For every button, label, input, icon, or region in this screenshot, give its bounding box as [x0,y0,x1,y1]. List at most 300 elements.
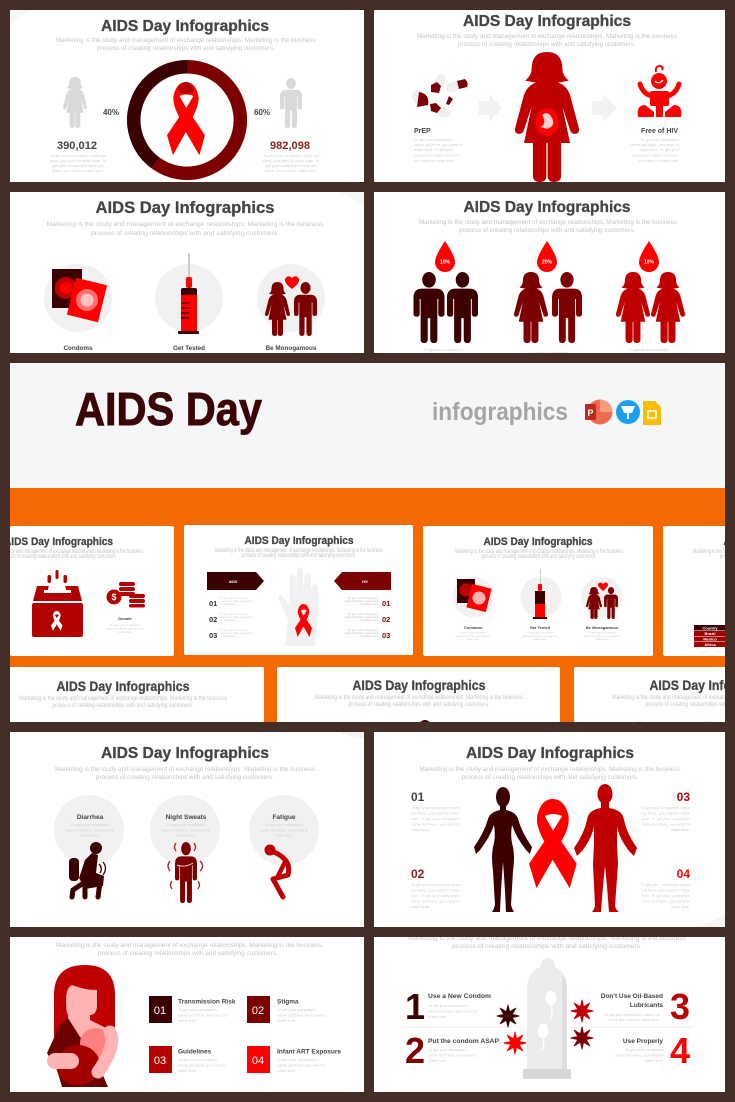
card subtitle [315,695,523,708]
step 1 [405,986,491,1027]
card background [423,526,653,656]
item 04: Infant ART Exposure [277,1048,341,1056]
text Night Sweats: name out there, you need to [162,828,210,832]
list left: To get your company's [220,628,248,632]
illustration: mother with baby [47,965,118,1087]
block 02: To get your company's name [411,882,461,887]
corner swoosh [338,192,364,208]
card heading: AIDS Day Infographics [352,677,486,693]
card background [10,667,264,727]
item 01: name out there, you need to [178,1012,227,1018]
block 01: name out there, you need to [411,822,460,826]
text Diarrhea: To get your company's [71,822,109,827]
icon: baby [638,66,681,117]
block 03 [640,790,690,832]
table: Brazil [705,631,715,636]
card: donate [0,526,174,656]
card subtitle [455,549,623,560]
subtitle: Marketing is the study and management of exchange relationships. Marketing is the business [46,222,324,228]
star dark [497,1005,519,1027]
item 02: Stigma [277,998,299,1006]
panel: couples statistics slide [374,192,725,355]
item 01: Transmission Risk [178,998,236,1006]
item 02 [247,996,326,1023]
subtitle: Marketing is the study and management of exchange relationships. Marketing is the business [56,943,322,949]
small captions: To get your company's [630,347,668,352]
small captions: To get your company's [530,350,568,355]
block 04: sure. To get your company's [642,893,690,898]
text Night Sweats: To get your company's [167,822,205,827]
heading: AIDS Day Infographics [101,745,269,762]
text block PrEP: make sure. To get your [414,147,454,152]
subtitle: process of creating relationships with and satisfying customers. [458,42,636,48]
small text: To get your company's [526,630,555,634]
text block right [263,153,320,173]
panel background [374,732,725,927]
text block PrEP: you need to make sure. [414,158,455,163]
panel background [374,937,725,1092]
card: bottom middle [277,667,560,732]
step 4: name out there, you need to [615,1052,664,1058]
label Condoms: Condoms [63,345,93,352]
icon: syringe [533,569,547,619]
block 04 [640,867,690,909]
block 03: sure. To get your company's [642,816,690,821]
drop 20%: 20% [542,260,553,266]
card: bottom right [574,667,735,749]
card background [574,667,734,727]
panel: body silhouettes slide [374,732,725,927]
table [694,625,729,647]
step 4 [615,1030,690,1071]
block 01 [411,790,461,832]
block 02: 02 [411,867,425,881]
card subtitle: Marketing is the study and management of exchange relationships. Marketing is the business [215,548,383,554]
labels: Condoms [464,625,483,630]
male silhouette [574,784,637,912]
list left: name out there, you need [220,615,252,619]
female silhouette [474,787,532,912]
drop 10%: 10% [440,260,451,266]
step 4: make sure. [645,1058,664,1063]
step 1: Use a New Condom [428,993,491,1000]
item 04: 04 [252,1055,264,1067]
circles [452,576,622,618]
star bright [504,1032,526,1054]
text Fatigue: make sure. [274,832,294,838]
label Night Sweats: Night Sweats [166,814,207,821]
step 1: name out there, you need to [428,1008,477,1014]
subtitle: process of creating relationships with and satisfying customers. [459,228,635,234]
panel: prevention methods slide [10,192,364,353]
head peek [419,720,431,732]
list left: name out there, you need [220,599,252,603]
pair: woman and man [514,272,582,343]
text block right: get your company's name out [266,163,317,168]
block 04: 04 [677,867,690,881]
list right [344,596,390,640]
icon: ribbon [529,799,577,888]
text Fatigue: To get your company's [265,822,303,827]
list left: 03 [209,631,217,640]
icon: Google Slides [643,401,661,425]
block 02: out there, you need to make [411,888,459,892]
list right: to make sure. [360,618,378,622]
icon: woman grey [63,77,87,128]
card: bottom left [10,667,264,727]
label Donate: Donate [118,616,133,621]
block 02: name out there, you need to [411,898,460,904]
subtitle: process of creating relationships with and satisfying customers. [96,775,274,781]
list left: To get your company's [220,596,248,600]
text block PrEP: name out there, you need to [414,142,463,147]
arrow left [479,94,502,122]
list left: To get your company's [220,612,248,616]
text Night Sweats [162,822,210,838]
panel: breastfeeding slide [10,920,364,1092]
small captions [424,347,668,355]
item 01: 01 [154,1005,166,1017]
item 03: 03 [154,1055,166,1067]
step 2: 2 [405,1030,425,1071]
card subtitle: Marketing is the study and management of exchange relationships. Marketing is the business [455,549,623,555]
item 03: name out there, you need to [178,1062,227,1068]
small captions: To get your company's [424,347,462,352]
label PrEP: PrEP [414,128,431,135]
heading: AIDS Day Infographics [96,198,274,217]
list left: to make sure. [220,634,237,638]
list right: To get your company's [348,612,378,616]
list left: 01 [209,599,217,608]
block 03: name out there, you need to [641,822,690,826]
corner swoosh [338,732,364,738]
text block Free of HIV: make sure. To get your [639,147,680,152]
text block right: there, you need to make sure. To [263,158,319,163]
icon: syringe [178,253,199,334]
item 02: make sure. [277,1018,296,1023]
block 01: To get your company's name [411,805,461,810]
step 4: To get your company's [625,1047,664,1052]
text block left: there, you need to make sure. [52,168,104,173]
card heading: AIDS Day Infographics [4,536,113,548]
icon: man night sweats [168,842,202,903]
circles peek [626,721,722,749]
card subtitle [612,695,735,708]
labels: Get Tested [530,625,551,630]
panel: prevention mother-to-child slide [374,10,725,182]
list right: 03 [382,631,390,640]
list right: name out there, you need [344,599,378,603]
item 04: To get your company's [277,1057,316,1062]
star maroon [571,1027,593,1049]
icon: PowerPoint [585,400,612,424]
hero band [10,363,725,488]
step 3: there, you need to make sure. [608,1017,660,1022]
item 03: make sure. [178,1068,197,1073]
text Diarrhea: name out there, you need to [66,828,114,832]
subtitle [55,767,315,781]
text block Free of HIV: To get your company's [640,137,679,142]
block 02: sure. To get your company's [411,893,460,898]
list left: name out there, you need [220,631,252,635]
block 03: out there, you need to make [642,810,690,816]
item 01: make sure. [178,1018,197,1023]
step 4: 4 [670,1030,690,1071]
panel background [10,732,364,927]
text Night Sweats: make sure. [176,832,196,838]
list right: name out there, you need [344,615,378,619]
text block PrEP: company's name out there, [414,152,461,158]
pair: two women [616,272,685,343]
dividers [402,1026,692,1028]
subtitle: Marketing is the study and management of exchange relationships. Marketing is the business [417,34,677,40]
panel background [374,10,725,182]
item 02: name out there, you need to [277,1012,326,1018]
block 04: name out there, you need to [641,898,690,904]
card heading: AIDS Day Infographics [56,678,190,694]
subtitle [46,222,324,237]
step 4: Use Properly [623,1038,663,1045]
hero title: AIDS Day [75,383,262,435]
text block right: To get your company's name out [263,153,320,158]
list left [209,596,252,640]
circles [44,264,325,332]
card background [277,667,560,727]
card subtitle: process of creating relationships with and satisfying customers. [242,553,356,559]
icon: coins [106,582,145,608]
block 01: sure. To get your company's [411,816,460,821]
list right: To get your company's [348,596,378,600]
circles [54,795,319,865]
block 04: make sure. [671,904,690,909]
table: Country [702,626,718,630]
text block Free of HIV: name out there, you need to [630,142,679,147]
arrow right [592,94,617,122]
heading: AIDS Day Infographics [464,199,631,216]
text block Free of HIV: you need to make sure. [638,158,679,163]
card heading: AIDS Day Infographics [484,536,592,548]
block 03: make sure. [671,827,690,832]
corner swoosh [695,915,725,927]
subtitle: process of creating relationships with and satisfying customers. [91,231,279,237]
card subtitle: process of creating relationships with and satisfying customers. [1,554,117,560]
drop 10% [435,241,455,272]
orange band with slide previews [0,488,735,749]
subtitle: Marketing is the study and management of exchange relationships. Marketing is the business [420,767,680,773]
block 01: out there, you need to make [411,810,459,816]
heading: AIDS Day Infographics [466,745,634,762]
block 01: make sure. [411,827,430,832]
item 02: 02 [252,1005,264,1017]
icon: donation box [32,570,83,637]
panel: condom steps slide [374,936,725,1092]
icon: person on toilet [69,842,106,897]
step 3: To get your company's name out [604,1012,661,1017]
list left: 02 [209,615,217,624]
orange background [10,488,725,722]
icon: PowerPoint: P [587,408,594,418]
item 04 [247,1046,341,1073]
subtitle clipped: process of creating relationships with and satisfying customers. [452,944,642,950]
item 04: name out there, you need to [277,1062,326,1068]
subtitle [56,943,322,957]
step 3: Lubricants [630,1002,663,1009]
subtitle: process of creating relationships with and satisfying customers. [97,46,275,52]
labels [464,625,619,630]
subtitle [420,767,680,781]
item 01 [149,996,236,1023]
step 2: make sure. [428,1058,447,1063]
card subtitle: process of creating relationships with and satisfying customers. [52,703,194,709]
small text [456,630,620,641]
item 04: make sure. [277,1068,296,1073]
step 1: 1 [405,986,425,1027]
banner HIV: HIV [362,580,369,584]
text block left: get your company's name out [53,163,104,168]
icon: couple [265,276,317,336]
label Fatigue: Fatigue [272,814,296,821]
small text: make sure. [595,637,609,641]
item 03: To get your company's [178,1057,217,1062]
card: table preview [663,526,735,656]
card subtitle [0,549,143,560]
stat: 390,012: 390,012 [57,140,97,152]
hero subtitle: infographics [432,398,568,426]
icon: pregnant woman [515,52,579,182]
card subtitle: Marketing is the study and management of exchange relationships. Marketing is the business [19,696,227,702]
card heading: AIDS Day Infographics [244,535,354,547]
text block right: there, you need to make sure. [265,168,317,173]
drop 10% third [639,241,659,272]
icon: man grey [280,78,302,128]
subtitle [419,220,677,234]
pair: two men [414,272,478,343]
corner swoosh [10,10,34,26]
subtitle: Marketing is the study and management of exchange relationships. Marketing is the business [55,767,315,773]
text block PrEP: To get your company's [414,137,453,142]
block 03: 03 [677,790,690,804]
step 1: make sure. [428,1014,447,1019]
Donate text: To get your company's [110,623,140,627]
block 02 [411,867,461,909]
subtitle: process of creating relationships with and satisfying customers. [462,775,639,781]
card subtitle: process of creating relationships with and satisfying customers. [348,702,490,708]
block 04: out there, you need to make [642,888,690,892]
donut chart [134,67,240,173]
panel background [10,192,364,353]
text Fatigue: name out there, you need to [260,828,308,832]
icon: pills [412,72,468,119]
panel background [10,10,364,182]
step 3: 3 [670,986,690,1027]
step 3: Don't Use Oil-Based [601,993,663,1000]
step 2: To get your company's [428,1047,467,1052]
small text: name out there, you need to [584,634,620,638]
table: Mexico [703,636,717,642]
small text: To get your company's [459,630,488,634]
block 01: 01 [411,790,425,804]
card: AIDS vs HIV hand [184,525,413,655]
list left: to make sure. [220,602,237,606]
drop 10% third: 10% [644,260,655,266]
item 03: Guidelines [178,1048,212,1056]
panel: donut gender split slide [10,10,364,182]
card subtitle [19,696,227,709]
list right: name out there, you need [344,631,378,635]
hero background [10,363,725,488]
icon: couple [586,582,618,619]
banner AIDS: AIDS [229,580,238,584]
drop 20% [537,241,557,272]
icon: red ribbon [167,82,205,155]
list right: 01 [382,599,390,608]
panel: symptoms slide [10,732,364,927]
table: Africa [704,642,716,647]
text block Free of HIV: company's name out there, [632,152,679,158]
card subtitle [215,548,383,559]
icon: condom packs [52,269,107,322]
text Diarrhea: make sure. [80,832,100,838]
label 60%: 60% [254,108,270,117]
item 03 [149,1046,227,1073]
step 3 [601,986,690,1027]
label Diarrhea: Diarrhea [77,814,104,821]
Donate text: make sure. [118,630,133,634]
block 03: To get your company's name [640,805,690,810]
subtitle: Marketing is the study and management of exchange relationships. Marketing is the business [56,38,316,44]
item 01: To get your company's [178,1007,217,1012]
panel background [10,937,364,1092]
card background [184,525,413,655]
text Diarrhea [66,822,114,838]
list right: To get your company's [348,628,378,632]
item 02: To get your company's [277,1007,316,1012]
subtitle clipped [408,936,686,950]
text block left [50,153,107,173]
list right: 02 [382,615,390,624]
text block left: To get your company's name out [50,153,107,158]
icon: condom [523,958,571,1079]
heading clipped: AIDS Day Infographics [101,920,269,937]
text block Free of HIV [630,137,680,163]
stat: 982,098: 982,098 [270,140,310,152]
card subtitle: process of creating relationships with and satisfying customers. [482,554,596,560]
icon: hand with ribbon [278,567,318,646]
heading: AIDS Day Infographics [101,18,269,35]
card background [10,526,174,656]
banner AIDS [207,572,264,590]
card subtitle [693,549,735,560]
subtitle: Marketing is the study and management of exchange relationships. Marketing is the business [419,220,677,226]
Donate text [106,623,144,634]
text block PrEP [414,137,463,163]
heading: AIDS Day Infographics [463,13,631,30]
small text: name out there, you need to [456,634,491,638]
subtitle: process of creating relationships with and satisfying customers. [98,951,278,957]
text block left: there, you need to make sure. To [50,158,106,163]
panel background [374,192,725,353]
label Be Monogamous: Be Monogamous [266,345,317,352]
label Get Tested: Get Tested [173,345,205,352]
small text: make sure. [533,637,547,641]
small text: name out there, you need to [522,634,558,638]
small text: make sure. [466,637,480,641]
icon: tired person [264,844,289,897]
icon: condom packs [457,579,492,612]
star red [571,1000,593,1022]
list right: to make sure. [360,634,378,638]
small text: To get your company's [588,630,617,634]
